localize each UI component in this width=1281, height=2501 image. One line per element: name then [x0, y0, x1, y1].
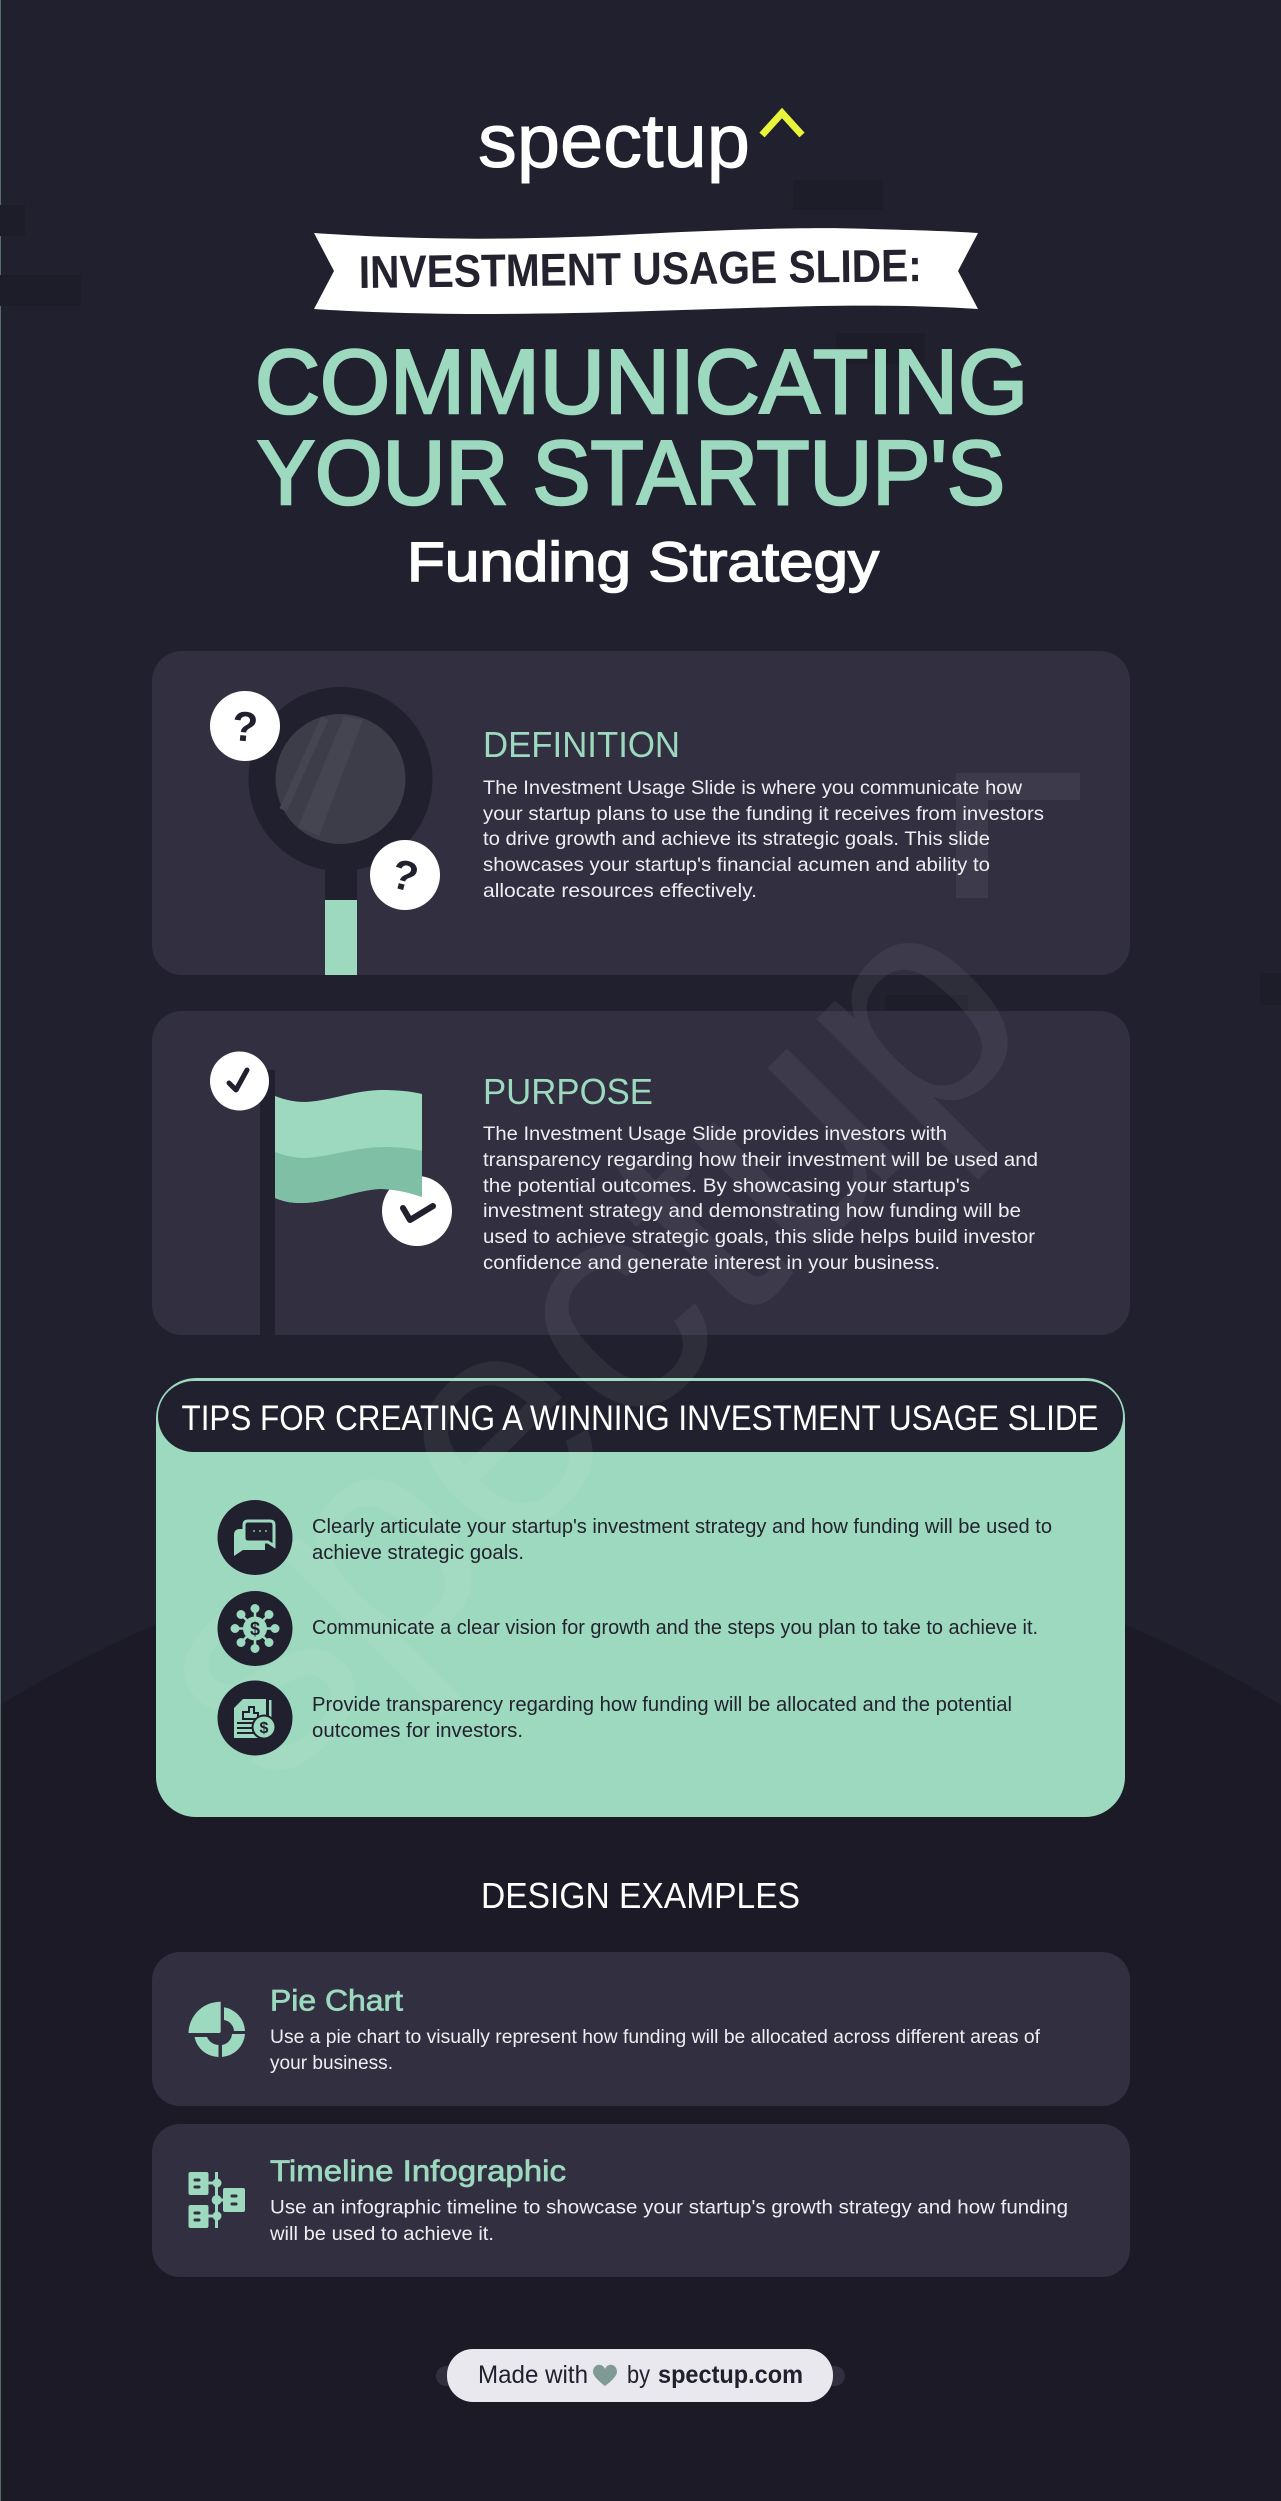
tip text 1: Clearly articulate your startup's investment strategy and how funding will be used to [312, 1516, 1052, 1538]
tip text 3: outcomes for investors. [312, 1720, 523, 1742]
design examples heading: DESIGN EXAMPLES [481, 1875, 800, 1916]
timeline text: will be used to achieve it. [269, 2223, 494, 2245]
timeline text: Timeline Infographic [270, 2155, 566, 2188]
purpose text [483, 1071, 1038, 1274]
definition text: allocate resources effectively. [483, 880, 757, 902]
main title: YOUR STARTUP'S [257, 423, 1005, 524]
timeline text [269, 2155, 1068, 2245]
tip text 3: Provide transparency regarding how funding will be allocated and the potential [312, 1694, 1012, 1716]
icon: question mark bubble [370, 840, 440, 910]
icon: pie chart [188, 2002, 245, 2057]
ribbon heading: INVESTMENT USAGE SLIDE: [358, 239, 922, 298]
timeline text: Use an infographic timeline to showcase your startup's growth strategy and how funding [270, 2196, 1068, 2218]
purpose text: The Investment Usage Slide provides investors with [483, 1123, 947, 1145]
purpose text: confidence and generate interest in your business. [483, 1252, 940, 1274]
definition text: The Investment Usage Slide is where you communicate how [483, 777, 1023, 799]
icon: heart [593, 2365, 617, 2386]
purpose text: transparency regarding how their investment will be used and [483, 1149, 1038, 1171]
footer badge: by [627, 2361, 650, 2389]
panel: pie chart example [152, 1952, 1130, 2106]
pie chart text: Use a pie chart to visually represent how funding will be allocated across different areas of [270, 2026, 1041, 2048]
panel: purpose [152, 1011, 1130, 1335]
footer badge: spectup.com [658, 2361, 803, 2389]
icon: question mark bubble: ? [230, 702, 260, 751]
panel: timeline example [152, 2124, 1130, 2277]
icon: virus money: $ [250, 1619, 260, 1639]
footer badge [436, 2349, 845, 2402]
pie chart text [270, 1984, 1041, 2074]
definition text: DEFINITION [483, 724, 680, 765]
purpose text: investment strategy and demonstrating how funding will be [483, 1200, 1021, 1222]
footer badge: Made with [478, 2361, 588, 2389]
icon: question mark bubble [210, 691, 280, 761]
icon: magnifying glass [210, 687, 440, 975]
icon: virus money [218, 1591, 292, 1666]
purpose text: PURPOSE [483, 1071, 653, 1112]
pie chart text: your business. [270, 2052, 393, 2074]
subtitle: Funding Strategy [407, 530, 879, 593]
icon: flag [210, 1052, 452, 1335]
icon: financial document [218, 1680, 292, 1756]
tip text 2: Communicate a clear vision for growth and the steps you plan to take to achieve it. [312, 1617, 1038, 1639]
purpose text: the potential outcomes. By showcasing your startup's [483, 1175, 970, 1197]
tip text 3 [312, 1694, 1012, 1742]
title ribbon [314, 228, 978, 314]
definition text: to drive growth and achieve its strategic goals. This slide [483, 828, 990, 850]
main title: COMMUNICATING [255, 332, 1028, 433]
watermark: spectup [73, 829, 1088, 1843]
definition text [483, 724, 1044, 902]
tips heading: TIPS FOR CREATING A WINNING INVESTMENT USAGE SLIDE [182, 1399, 1098, 1438]
panel: tips [156, 1378, 1125, 1817]
logo: spectup: spectup [478, 99, 750, 184]
icon: chat bubbles [218, 1500, 292, 1575]
tip text 1: achieve strategic goals. [312, 1542, 524, 1564]
pie chart text: Pie Chart [270, 1984, 404, 2018]
icon: financial document: $ [260, 1720, 269, 1737]
icon: check mark [403, 1206, 433, 1220]
tips header pill [158, 1381, 1123, 1452]
icon: question mark bubble: ? [386, 849, 423, 902]
main title [255, 332, 1028, 593]
tip text 1 [312, 1516, 1052, 1564]
definition text: your startup plans to use the funding it receives from investors [483, 803, 1044, 825]
icon: check bubble [210, 1052, 269, 1110]
icon: logo caret [762, 113, 802, 135]
purpose text: used to achieve strategic goals, this slide helps build investor [483, 1226, 1036, 1248]
definition text: showcases your startup's financial acumen and ability to [483, 854, 990, 876]
panel: definition [152, 651, 1130, 975]
icon: timeline [188, 2172, 245, 2228]
